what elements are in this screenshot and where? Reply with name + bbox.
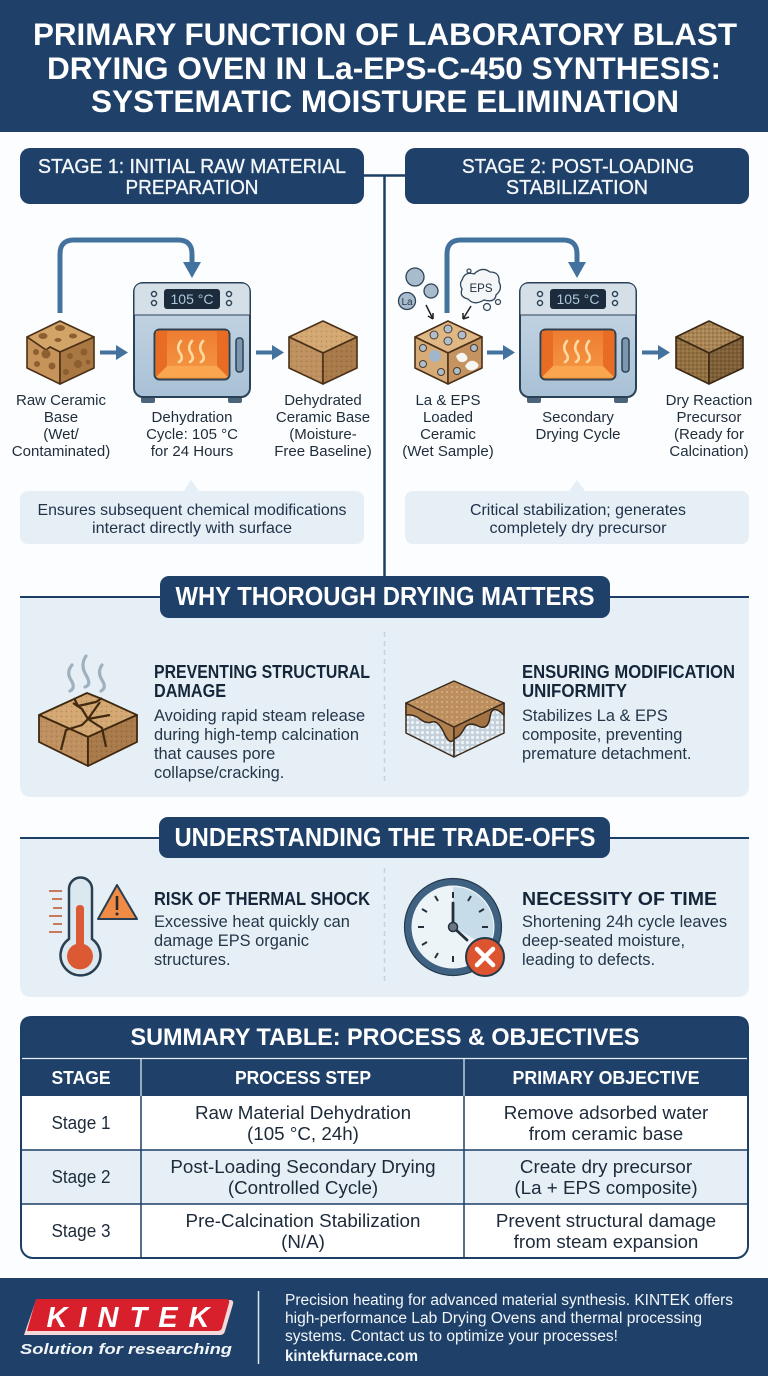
label: raw ceramic base: Base [44, 409, 78, 426]
icon: cracked ceramic block [39, 656, 137, 766]
stage 2 heading: STAGE 2: POST-LOADING [462, 155, 694, 178]
title: DRYING OVEN IN La-EPS-C-450 SYNTHESIS: [47, 50, 721, 86]
table row: stage 2: Create dry precursor [520, 1156, 692, 1177]
text: necessity of time: deep-seated moisture, [522, 932, 685, 950]
table row: stage 2: (La + EPS composite) [514, 1177, 698, 1198]
stage 1 heading: PREPARATION [126, 176, 258, 199]
title [33, 16, 737, 119]
label: loaded ceramic: Loaded [423, 409, 473, 426]
icon: drying oven [134, 283, 250, 403]
label: secondary drying cycle: Drying Cycle [535, 426, 621, 443]
label: loaded ceramic: (Wet Sample) [402, 443, 494, 460]
table row: stage 3: Prevent structural damage [496, 1210, 716, 1231]
footer text: high-performance Lab Drying Ovens and thermal processing [285, 1310, 702, 1327]
text: necessity of time [522, 889, 727, 969]
table column headers: STAGE [52, 1067, 110, 1088]
heading: why thorough drying matters: WHY THOROUGH DRYING MATTERS [176, 583, 594, 611]
text: preventing structural damage [154, 662, 370, 782]
icon: La particles [398, 268, 438, 319]
label: dehydration cycle: for 24 Hours [151, 443, 233, 460]
text: ensuring modification uniformity [522, 662, 735, 763]
callout: stage 1 note: Ensures subsequent chemical modifications [38, 502, 346, 519]
table row: stage 1: (105 °C, 24h) [247, 1123, 359, 1144]
table column headers [52, 1067, 700, 1088]
connector lines between stages [364, 176, 405, 576]
table row: stage 1: from ceramic base [529, 1123, 683, 1144]
label: dry reaction precursor: (Ready for [674, 426, 744, 443]
stage 2 heading [405, 148, 749, 204]
heading: understanding the trade-offs: UNDERSTANDING THE TRADE-OFFS [174, 824, 596, 852]
logo: KINTEK: KINTEK [46, 1302, 212, 1334]
arrow: oven to dehydrated [256, 345, 284, 360]
arrow: loop to oven [447, 240, 586, 313]
callout: stage 2 note [405, 480, 749, 544]
stage 1 heading: STAGE 1: INITIAL RAW MATERIAL [38, 155, 346, 178]
label: dehydration cycle: Dehydration [152, 409, 232, 426]
icon: dehydrated cube [289, 321, 357, 384]
table row: stage 1: Remove adsorbed water [504, 1102, 708, 1123]
label: dehydrated ceramic base: Dehydrated [284, 392, 362, 409]
title: SYSTEMATIC MOISTURE ELIMINATION [91, 83, 679, 119]
label: dry reaction precursor: Calcination) [669, 443, 749, 460]
text: ensuring modification uniformity: premature detachment. [522, 745, 691, 763]
table row: stage 3: Stage 3 [52, 1220, 110, 1241]
text: preventing structural damage: PREVENTING STRUCTURAL [154, 662, 370, 682]
footer text: systems. Contact us to optimize your processes! [285, 1328, 618, 1345]
icon: drying oven: 105 °C [557, 291, 599, 307]
heading: understanding the trade-offs [159, 817, 610, 858]
table: process and objectives summary [20, 1016, 749, 1258]
logo: KINTEK: Solution for researching [20, 1342, 232, 1358]
arrow: loop to oven [60, 240, 201, 313]
icon: EPS cloud: EPS [469, 283, 493, 295]
footer text [285, 1292, 733, 1365]
table row: stage 2: Post-Loading Secondary Drying [170, 1156, 436, 1177]
icon: raw ceramic cube [27, 321, 94, 384]
table row: stage 3 [52, 1210, 716, 1252]
callout: stage 1 note [20, 480, 364, 544]
table title: SUMMARY TABLE: PROCESS & OBJECTIVES [130, 1024, 640, 1051]
table row: stage 3: Pre-Calcination Stabilization [186, 1210, 420, 1231]
logo: KINTEK [20, 1299, 233, 1358]
label: raw ceramic base: (Wet/ [43, 426, 80, 443]
text: risk of thermal shock: damage EPS organic [154, 932, 309, 950]
label: dehydrated ceramic base: Ceramic Base [276, 409, 370, 426]
footer text: Precision heating for advanced material synthesis. KINTEK offers [285, 1292, 733, 1309]
panel: stage 2 [398, 148, 752, 544]
table row: stage 2: Stage 2 [52, 1166, 110, 1187]
text: preventing structural damage: collapse/cracking. [154, 764, 284, 782]
text: necessity of time: Shortening 24h cycle leaves [522, 913, 727, 931]
panel: why thorough drying matters [20, 576, 749, 797]
text: necessity of time: NECESSITY OF TIME [522, 889, 717, 909]
table row: stage 1: Raw Material Dehydration [195, 1102, 411, 1123]
text: preventing structural damage: that causes pore [154, 745, 275, 763]
table row: stage 2 [52, 1156, 698, 1198]
text: preventing structural damage: DAMAGE [154, 681, 226, 701]
label: dry reaction precursor: Dry Reaction [666, 392, 752, 409]
label: dehydrated ceramic base: (Moisture- [289, 426, 357, 443]
text: ensuring modification uniformity: composite, preventing [522, 726, 682, 744]
title: PRIMARY FUNCTION OF LABORATORY BLAST [33, 16, 737, 52]
icon: clock with error badge [404, 878, 504, 976]
text: preventing structural damage: during high-temp calcination [154, 726, 359, 744]
footer [0, 1278, 768, 1376]
icon: layered composite slab [406, 681, 504, 757]
panel: stage 1 [12, 148, 372, 544]
label: raw ceramic base: Raw Ceramic [16, 392, 107, 409]
text: ensuring modification uniformity: UNIFORMITY [522, 681, 627, 701]
table column headers: PROCESS STEP [235, 1067, 371, 1088]
label: secondary drying cycle: Secondary [542, 409, 614, 426]
table row: stage 2: (Controlled Cycle) [228, 1177, 378, 1198]
callout: stage 1 note: interact directly with surface [92, 520, 292, 537]
arrow: oven to precursor [642, 345, 670, 360]
heading: why thorough drying matters [160, 576, 610, 618]
table row: stage 3: from steam expansion [514, 1231, 698, 1252]
text: risk of thermal shock: Excessive heat quickly can [154, 913, 350, 931]
arrow: loaded to oven [487, 345, 515, 360]
callout: stage 2 note: Critical stabilization; generates [470, 502, 686, 519]
table column headers: PRIMARY OBJECTIVE [512, 1067, 700, 1088]
icon: dry precursor cube [676, 321, 743, 384]
footer text: kintekfurnace.com [285, 1348, 418, 1365]
icon: loaded ceramic cube [415, 321, 482, 384]
text: ensuring modification uniformity: ENSURING MODIFICATION [522, 662, 735, 682]
label: loaded ceramic: La & EPS [415, 392, 481, 409]
table row: stage 1: Stage 1 [52, 1112, 110, 1133]
stage 1 heading [20, 148, 364, 204]
icon: thermometer with warning [49, 878, 137, 975]
text: risk of thermal shock: structures. [154, 951, 231, 969]
label: dehydrated ceramic base: Free Baseline) [274, 443, 372, 460]
icon: drying oven [520, 283, 636, 403]
label: raw ceramic base: Contaminated) [12, 443, 110, 460]
label: dehydration cycle: Cycle: 105 °C [146, 426, 238, 443]
label: dry reaction precursor: Precursor [676, 409, 742, 426]
stage 2 heading: STABILIZATION [506, 176, 648, 199]
text: preventing structural damage: Avoiding rapid steam release [154, 707, 365, 725]
table row: stage 3: (N/A) [281, 1231, 325, 1252]
text: necessity of time: leading to defects. [522, 951, 655, 969]
arrow: raw to oven [100, 345, 128, 360]
icon: EPS cloud [460, 269, 500, 319]
text: risk of thermal shock [154, 889, 370, 969]
label: loaded ceramic: Ceramic [420, 426, 476, 443]
panel: understanding the trade-offs [20, 817, 749, 997]
table row: stage 1 [52, 1102, 708, 1144]
text: risk of thermal shock: RISK OF THERMAL SHOCK [154, 889, 370, 909]
icon: drying oven: 105 °C [171, 291, 213, 307]
callout: stage 2 note: completely dry precursor [490, 520, 667, 537]
text: ensuring modification uniformity: Stabilizes La & EPS [522, 707, 668, 725]
header banner [0, 0, 768, 132]
icon: La particles: La [401, 297, 413, 308]
